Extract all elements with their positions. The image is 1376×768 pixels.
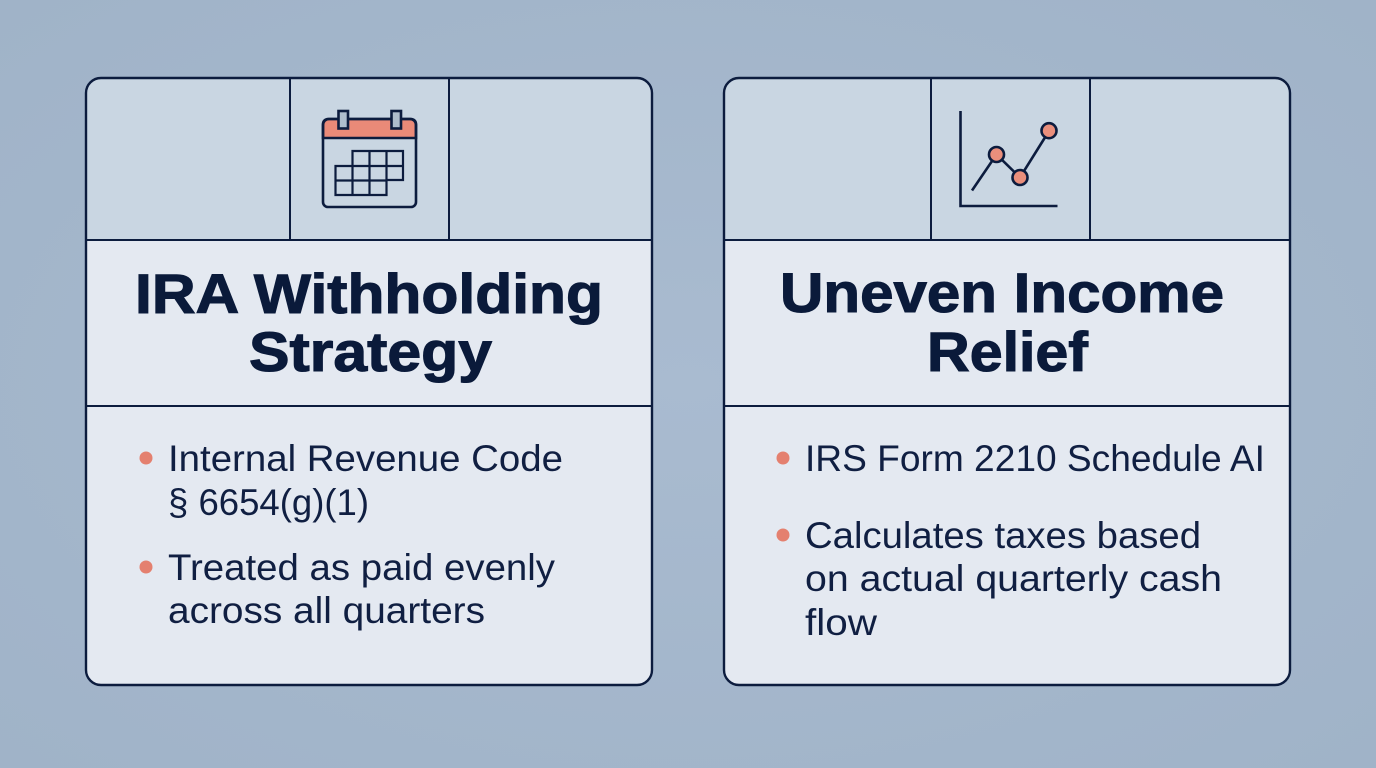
bullet: Internal Revenue Code [140,438,563,523]
icon: line chart [960,111,1058,206]
bullet: Calculates taxes based: on actual quarterly cash [805,558,1222,599]
bullet: Calculates taxes based: Calculates taxes based [805,515,1201,556]
panel: IRA Withholding Strategy [86,78,652,685]
heading: IRA Withholding Strategy [135,262,603,383]
bullet: Internal Revenue Code: Internal Revenue Code [168,438,563,479]
bullet: Calculates taxes based [776,515,1222,643]
heading: Uneven Income Relief [780,261,1224,383]
heading: Uneven Income Relief: Relief [927,320,1088,383]
panel background [86,78,652,685]
panel: Uneven Income Relief [724,78,1290,685]
heading: IRA Withholding Strategy: IRA Withholding [135,262,603,325]
bullet: Internal Revenue Code: § 6654(g)(1) [168,482,369,523]
heading: Uneven Income Relief: Uneven Income [780,261,1224,324]
bullet: IRS Form 2210 Schedule AI: IRS Form 2210 Schedule AI [805,438,1265,479]
bullet: Treated as paid evenly: Treated as paid evenly [168,547,556,588]
bullet: Calculates taxes based: flow [805,602,877,643]
panel background [724,78,1290,685]
bullet: Treated as paid evenly [140,547,556,631]
heading: IRA Withholding Strategy: Strategy [249,320,492,383]
icon: calendar [323,111,416,207]
bullet: Treated as paid evenly: across all quarters [168,590,485,631]
